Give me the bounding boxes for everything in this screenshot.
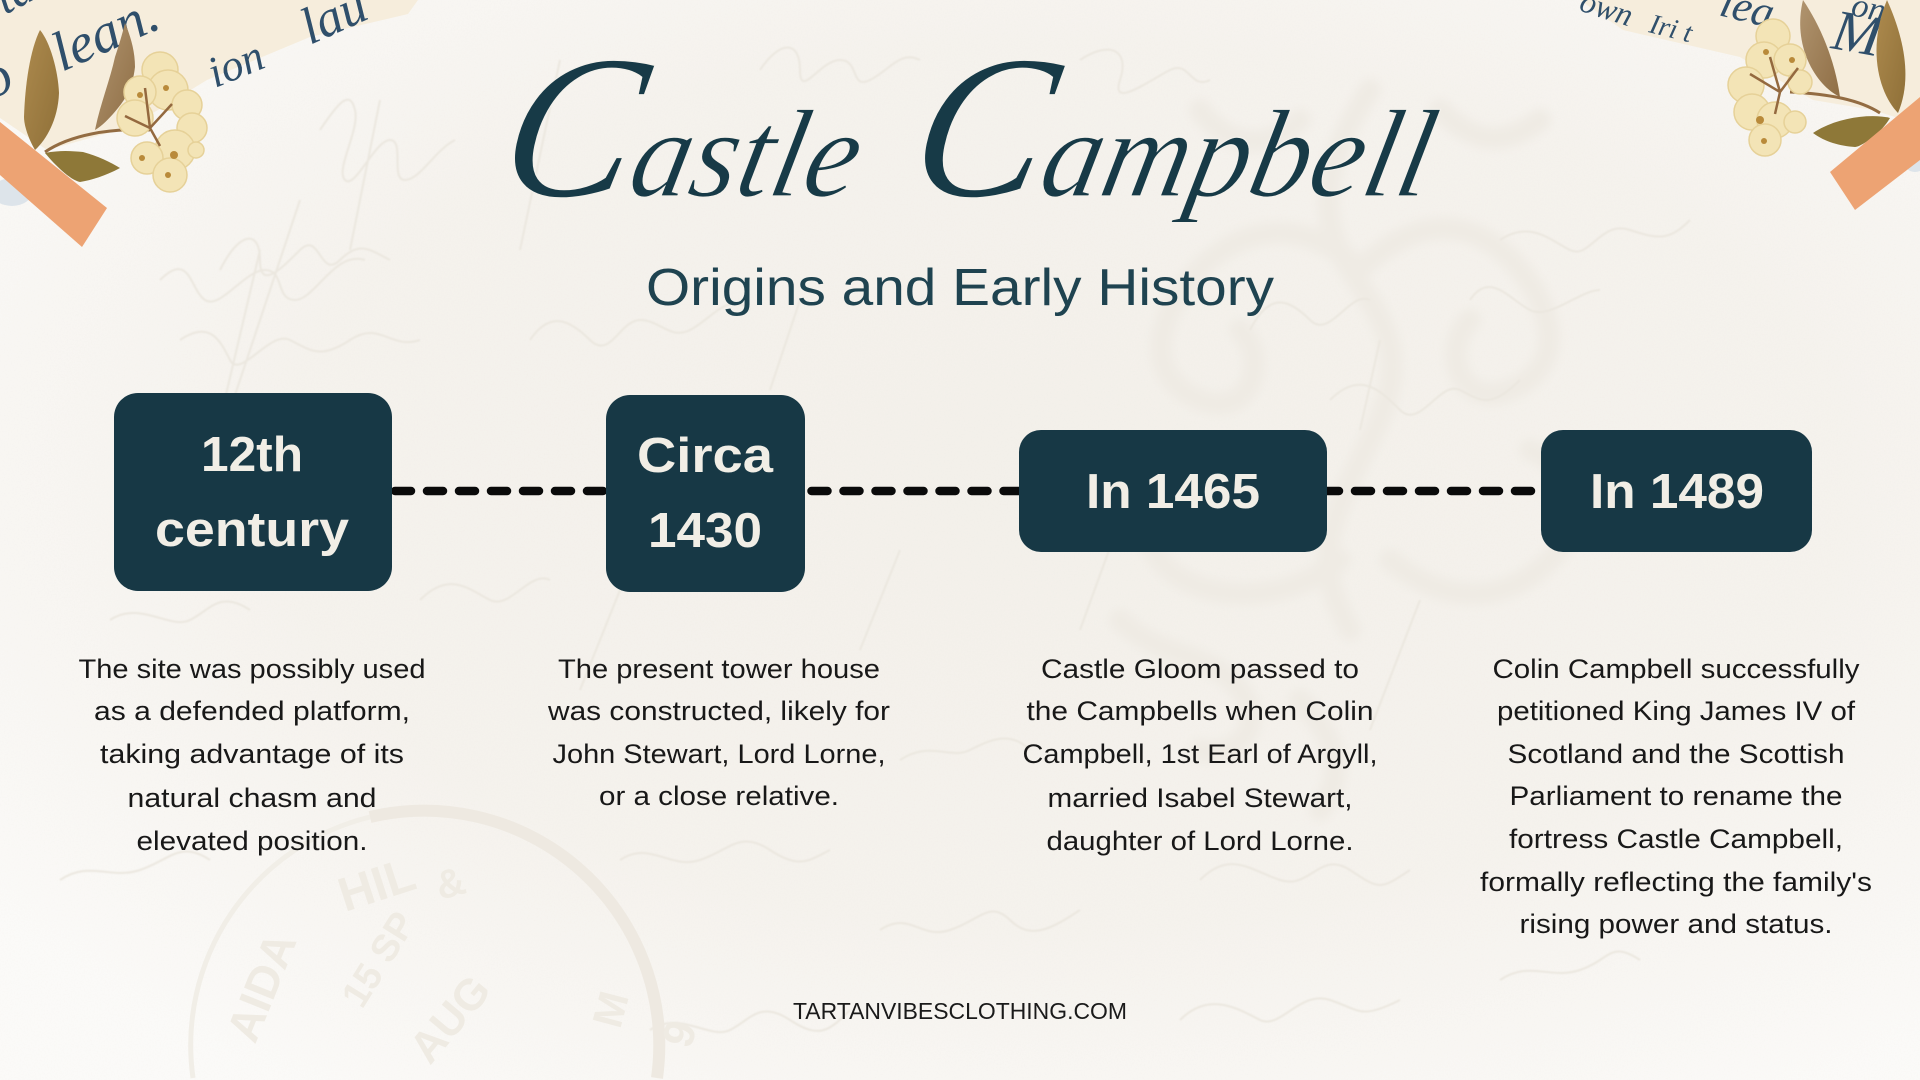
decoration: top-right corner collage — [1576, 0, 1920, 210]
background: faint postmark stamp: AUG — [400, 966, 501, 1072]
text block: In 1465: Campbell, 1st Earl of Argyll, — [1022, 739, 1378, 769]
text block: 12th century: elevated position. — [136, 826, 368, 856]
background: faint damask ornament — [1120, 90, 1575, 810]
text block: In 1489 — [1480, 654, 1872, 939]
dried leaves — [24, 30, 59, 150]
orange tape — [0, 122, 107, 247]
text block: Circa 1430: John Stewart, Lord Lorne, — [552, 739, 886, 769]
text block: 12th century: natural chasm and — [128, 783, 376, 813]
background: faint postmark stamp: & — [431, 859, 470, 909]
date box: In 1465 — [1019, 430, 1327, 552]
orange tape — [1830, 97, 1920, 210]
text block: In 1465: Castle Gloom passed to — [1041, 654, 1359, 684]
text block: In 1489: Colin Campbell successfully — [1492, 654, 1860, 684]
handwriting on paper — [1576, 0, 1889, 70]
date box: In 1465: In 1465 — [1086, 465, 1260, 519]
background: faint postmark stamp — [191, 811, 707, 1078]
date box: In 1489: In 1489 — [1590, 465, 1764, 519]
title: Castle — [485, 13, 891, 241]
text block: Circa 1430: or a close relative. — [599, 781, 839, 811]
background: faint postmark stamp: 15 SP — [334, 905, 424, 1015]
text block: In 1465: married Isabel Stewart, — [1048, 783, 1352, 813]
handwriting on paper — [0, 0, 376, 111]
date box: 12th century: century — [155, 503, 349, 557]
text block: 12th century — [78, 654, 426, 856]
date box: Circa 1430: 1430 — [648, 504, 762, 558]
text block: In 1489: rising power and status. — [1520, 909, 1832, 939]
dried flower cluster — [1728, 19, 1812, 156]
background: faint handwriting strokes — [60, 48, 1690, 1032]
timeline connector 2 — [812, 487, 1024, 495]
background: faint postmark stamp: M — [583, 986, 638, 1032]
text block: In 1465: daughter of Lord Lorne. — [1046, 826, 1354, 856]
text block: Circa 1430 — [547, 654, 890, 811]
date box: Circa 1430 — [606, 395, 805, 592]
text block: Circa 1430: was constructed, likely for — [547, 696, 890, 726]
title — [485, 13, 1464, 241]
paper scrap under tape — [0, 178, 32, 206]
dried leaves — [1876, 0, 1905, 113]
date box: In 1489 — [1541, 430, 1812, 552]
date box: 12th century: 12th — [201, 428, 303, 482]
date box: 12th century — [114, 393, 392, 591]
text block: In 1489: formally reflecting the family's — [1480, 867, 1872, 897]
text block: In 1489: Scotland and the Scottish — [1508, 739, 1844, 769]
decoration: top-left corner collage — [0, 0, 418, 247]
handwriting on paper: ion — [200, 31, 271, 97]
text block: In 1489: Parliament to rename the — [1510, 781, 1842, 811]
footer website: TARTANVIBESCLOTHING.COM — [793, 998, 1127, 1024]
text block: 12th century: The site was possibly used — [78, 654, 426, 684]
timeline connector 1 — [395, 487, 610, 495]
handwriting on paper: Iri t — [1645, 8, 1696, 49]
text block: In 1489: fortress Castle Campbell, — [1509, 824, 1843, 854]
dried flower cluster — [117, 52, 207, 192]
text block: In 1489: petitioned King James IV of — [1497, 696, 1856, 726]
text block: 12th century: as a defended platform, — [94, 696, 410, 726]
subtitle: Origins and Early History — [646, 259, 1274, 317]
text block: In 1465: the Campbells when Colin — [1026, 696, 1374, 726]
paper scrap under tape — [1903, 148, 1920, 172]
title: Campbell — [895, 13, 1464, 241]
date box: Circa 1430: Circa — [637, 429, 774, 483]
text block: Circa 1430: The present tower house — [558, 654, 880, 684]
torn cream paper — [1580, 0, 1920, 125]
background: faint postmark stamp: HIL — [332, 848, 422, 922]
background: faint postmark stamp: AIDA — [216, 925, 306, 1049]
background: faint postmark stamp: 9 — [653, 1015, 707, 1053]
text block: 12th century: taking advantage of its — [100, 739, 404, 769]
timeline connector 3 — [1323, 487, 1531, 495]
text block: In 1465 — [1022, 654, 1378, 856]
torn cream paper — [0, 0, 418, 150]
